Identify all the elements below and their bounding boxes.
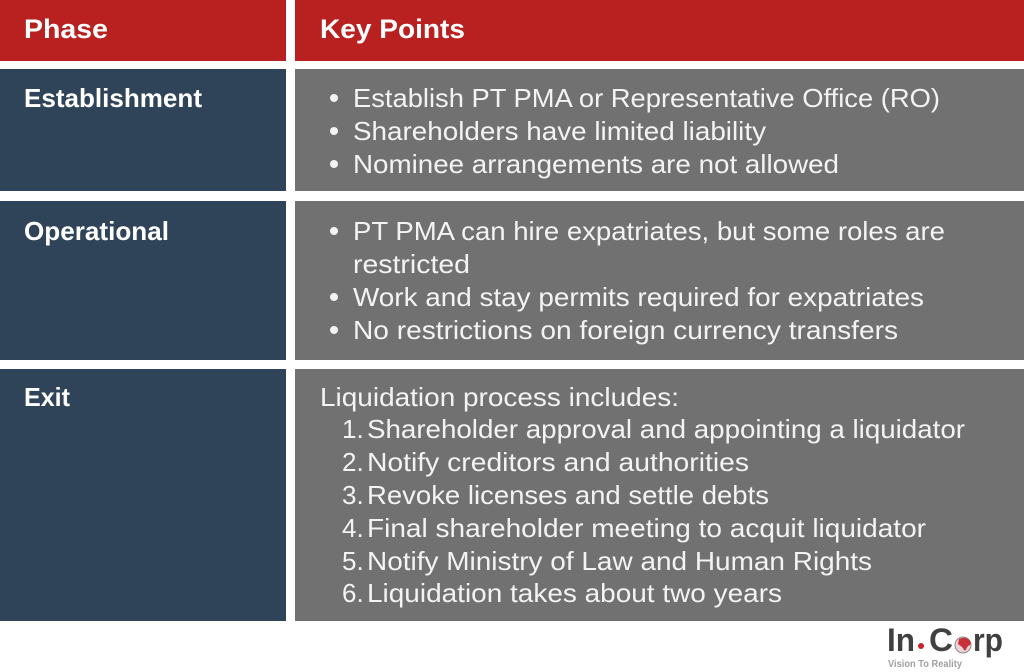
key points: Operational: No restrictions on foreign currency transfers xyxy=(353,315,898,345)
row: Operational xyxy=(0,201,1024,360)
phase label: Establishment: Establishment xyxy=(24,83,202,113)
key points: Exit: Shareholder approval and appointing a liquidator xyxy=(367,414,965,444)
key points: Exit: 5. xyxy=(342,546,364,576)
logo: InCorp: In xyxy=(887,622,915,658)
key points: Exit: 6. xyxy=(342,578,364,608)
header: Key Points xyxy=(295,0,1024,61)
key points: Exit: 3. xyxy=(342,480,364,510)
row: Exit xyxy=(0,369,1024,621)
key points: Operational: restricted xyxy=(353,249,470,279)
key points: Establishment: Shareholders have limited liability xyxy=(353,116,766,146)
key points: Exit: 2. xyxy=(342,447,364,477)
key points: Exit: Notify creditors and authorities xyxy=(367,447,749,477)
key points: Operational xyxy=(295,201,1024,360)
key points: Establishment: Establish PT PMA or Representative Office (RO) xyxy=(353,83,940,113)
key points: Exit: Final shareholder meeting to acquit liquidator xyxy=(367,513,926,543)
logo: InCorp: rp xyxy=(973,622,1003,658)
key points: Establishment xyxy=(295,69,1024,191)
table header row xyxy=(0,0,1024,61)
key points: Operational: Work and stay permits required for expatriates xyxy=(353,282,924,312)
phase label: Operational: Operational xyxy=(24,216,169,246)
logo: InCorp: Vision To Reality xyxy=(888,658,962,670)
header: Phase: Phase xyxy=(24,14,108,44)
key points: Exit: Revoke licenses and settle debts xyxy=(367,480,769,510)
logo: InCorp xyxy=(887,622,1003,670)
row: Establishment xyxy=(0,69,1024,191)
logo: InCorp: C xyxy=(929,622,953,658)
key points: Operational: PT PMA can hire expatriates, but some roles are xyxy=(353,216,945,246)
phase label: Establishment xyxy=(0,69,286,191)
header: Phase xyxy=(0,0,286,61)
key points: Exit xyxy=(295,369,1024,621)
phase label: Exit: Exit xyxy=(24,382,70,412)
key points: Exit: Notify Ministry of Law and Human Rights xyxy=(367,546,872,576)
key points: Exit: 4. xyxy=(342,513,364,543)
key points: Establishment: Nominee arrangements are not allowed xyxy=(353,149,839,179)
key points: Exit: Liquidation takes about two years xyxy=(367,578,782,608)
phase label: Exit xyxy=(0,369,286,621)
phase label: Operational xyxy=(0,201,286,360)
icon: globe xyxy=(955,637,971,653)
header: Key Points: Key Points xyxy=(320,14,465,44)
key points: Exit: 1. xyxy=(342,414,364,444)
key points: Exit: Liquidation process includes: xyxy=(320,382,679,412)
